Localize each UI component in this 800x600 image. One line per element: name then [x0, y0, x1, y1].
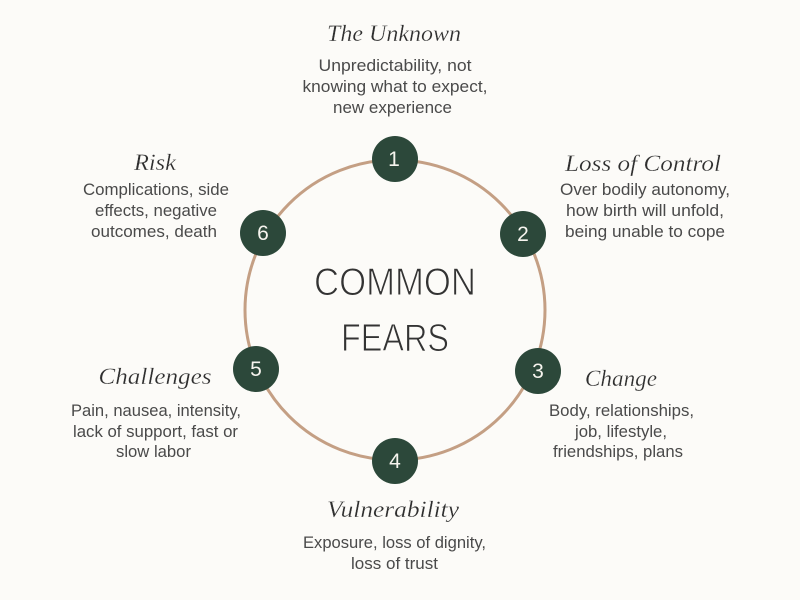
node 3	[515, 348, 561, 394]
text block: challenges: Pain, nausea, intensity,	[71, 402, 241, 420]
text block: change: Body, relationships,	[549, 402, 694, 420]
text block: risk: Risk	[133, 150, 177, 175]
text block: loss of control: being unable to cope	[565, 223, 725, 241]
text block: loss of control: Loss of Control	[564, 151, 721, 176]
text block: loss of control: Over bodily autonomy,	[560, 181, 730, 199]
text block: challenges: lack of support, fast or	[73, 423, 239, 441]
node 6: 6	[257, 222, 269, 245]
node 4: 4	[389, 450, 401, 473]
central title: FEARS	[341, 317, 449, 360]
text block: risk: effects, negative	[95, 202, 217, 220]
text block: vulnerability	[303, 497, 486, 573]
text block: change: friendships, plans	[553, 443, 683, 461]
text block: loss of control: how birth will unfold,	[566, 202, 724, 220]
text block: challenges: slow labor	[116, 443, 191, 461]
node 5	[233, 346, 279, 392]
text block: the unknown: knowing what to expect,	[302, 78, 488, 96]
text block: vulnerability: loss of trust	[351, 555, 438, 573]
text block: change: job, lifestyle,	[574, 423, 667, 441]
text block: the unknown: The Unknown	[327, 21, 461, 46]
node 5: 5	[250, 358, 262, 381]
text block: challenges: Challenges	[98, 364, 212, 389]
text block: risk: Complications, side	[83, 181, 229, 199]
central title: COMMON	[314, 261, 476, 304]
ring connecting the fears	[245, 160, 545, 460]
text block: risk: outcomes, death	[91, 223, 217, 241]
central title	[314, 261, 476, 360]
node 1: 1	[388, 148, 400, 171]
text block: vulnerability: Exposure, loss of dignity,	[303, 534, 486, 552]
text block: change	[549, 366, 694, 461]
node 4	[372, 438, 418, 484]
text block: vulnerability: Vulnerability	[327, 497, 460, 522]
node 2	[500, 211, 546, 257]
node 3: 3	[532, 360, 544, 383]
text block: risk	[83, 150, 229, 241]
text block: loss of control	[560, 151, 730, 241]
node 6	[240, 210, 286, 256]
text block: the unknown: new experience	[333, 99, 452, 117]
text block: the unknown	[302, 21, 488, 117]
text block: change: Change	[585, 366, 657, 391]
text block: the unknown: Unpredictability, not	[318, 57, 472, 75]
text block: challenges	[71, 364, 241, 461]
node 2: 2	[517, 223, 529, 246]
node 1	[372, 136, 418, 182]
